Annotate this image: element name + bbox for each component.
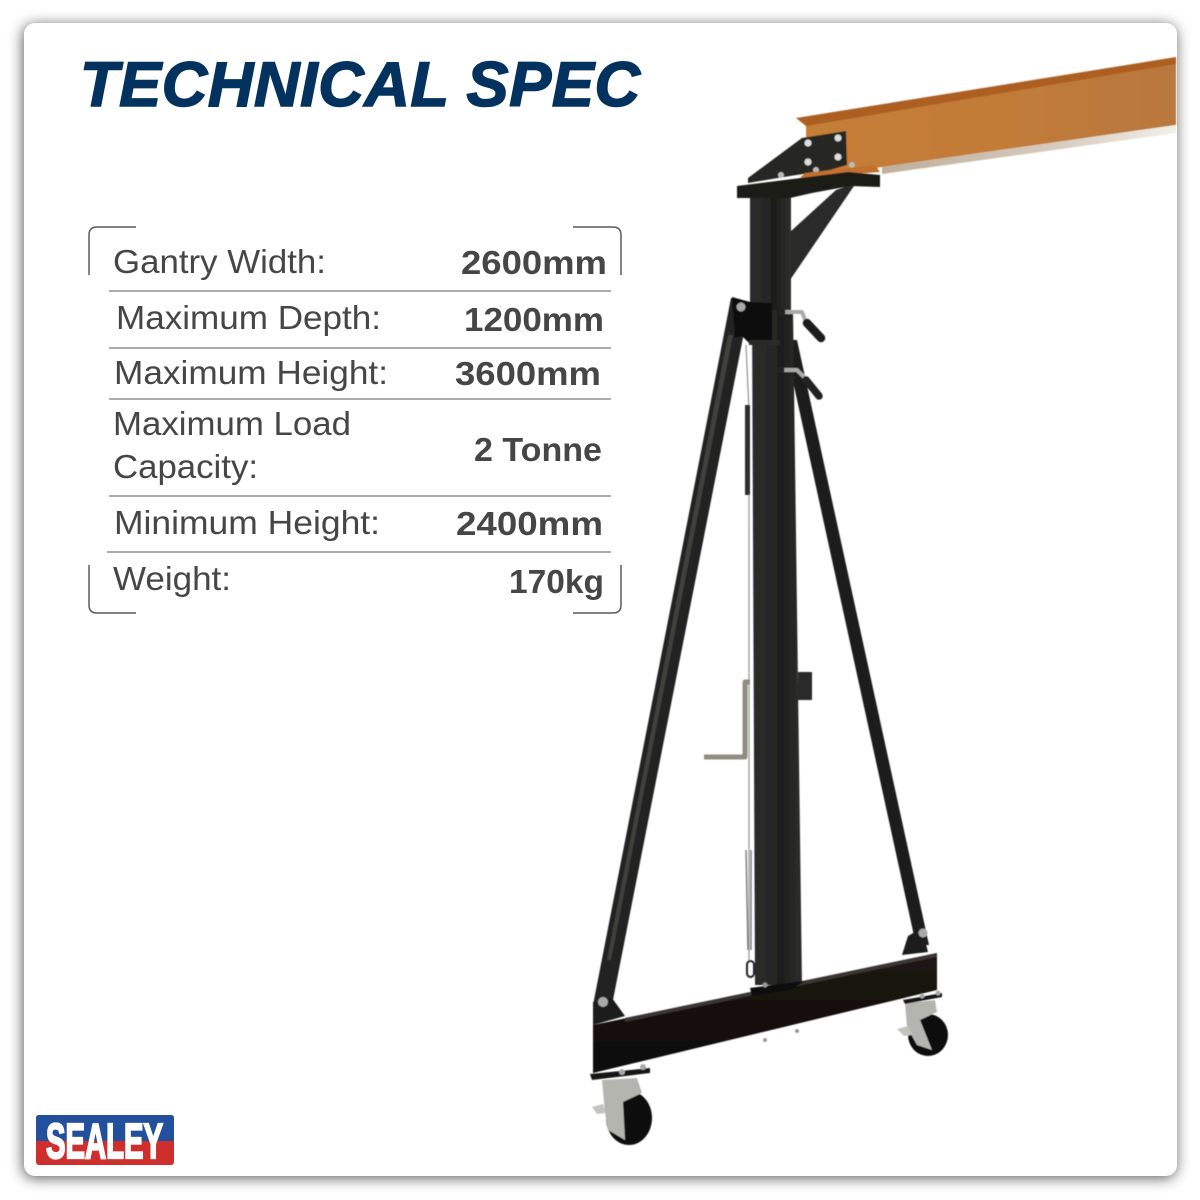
row: minimum height	[114, 504, 603, 542]
row: maximum load capacity: Maximum Load	[113, 405, 351, 442]
row: maximum load capacity: Capacity:	[113, 448, 258, 485]
mounting plate with bolts	[748, 131, 880, 183]
spec table	[89, 227, 621, 613]
column tab	[798, 672, 812, 700]
left caster	[590, 1064, 652, 1145]
row: maximum height	[114, 354, 601, 392]
row: minimum height: 2400mm	[456, 505, 603, 542]
bracket corners	[89, 227, 621, 613]
right leg	[784, 340, 929, 945]
left leg	[593, 298, 750, 1005]
row: weight	[113, 560, 604, 600]
row: maximum load capacity: 2 Tonne	[474, 431, 602, 468]
row: gantry width	[113, 243, 607, 281]
row: maximum height: 3600mm	[455, 355, 601, 392]
angled brace	[775, 183, 856, 280]
row: maximum depth: 1200mm	[464, 301, 604, 338]
gantry crane illustration	[590, 57, 1176, 1145]
locking handles	[778, 308, 821, 396]
row: minimum height: Minimum Height:	[114, 504, 380, 541]
top tray	[737, 172, 880, 198]
wire and latch	[745, 345, 754, 977]
title: TECHNICAL SPEC	[80, 50, 642, 120]
lower column	[752, 310, 802, 985]
logo: Sealey	[36, 1115, 174, 1169]
row: maximum depth	[116, 299, 604, 338]
base beam	[593, 928, 937, 1073]
row: gantry width: 2600mm	[461, 244, 607, 281]
row: weight: Weight:	[113, 560, 231, 597]
row: maximum load capacity	[113, 405, 602, 485]
right caster	[897, 990, 948, 1056]
crank handle	[704, 682, 750, 757]
row: gantry width: Gantry Width:	[113, 243, 326, 280]
row: weight: 170kg	[509, 563, 604, 600]
upper column	[750, 197, 791, 312]
logo: Sealey: SEALEY	[46, 1115, 163, 1169]
row: maximum height: Maximum Height:	[114, 354, 388, 391]
clamp collar	[732, 297, 780, 345]
steel beam	[796, 57, 1176, 174]
row: maximum depth: Maximum Depth:	[116, 299, 381, 336]
